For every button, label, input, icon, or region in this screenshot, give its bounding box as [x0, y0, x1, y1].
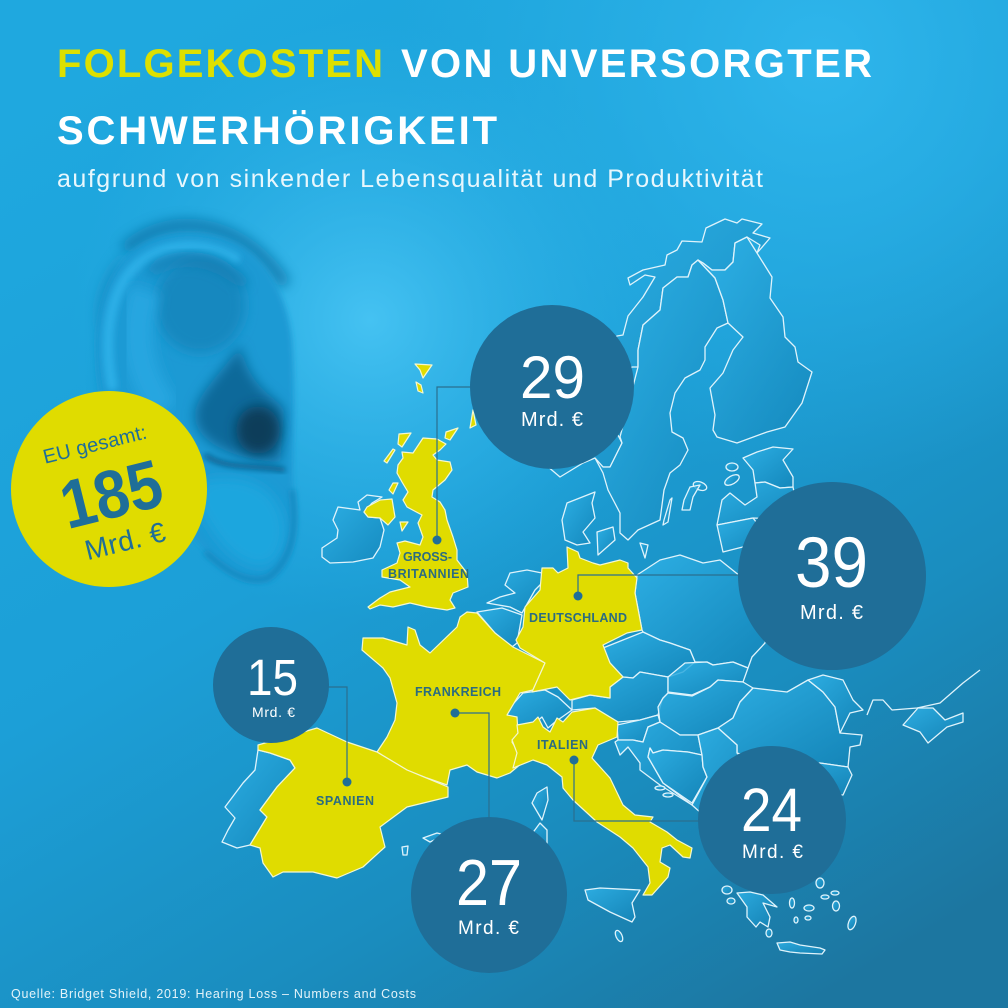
callout: EU gesamt 185: EU gesamt: — [41, 422, 149, 469]
country labels: FRANKREICH — [415, 685, 501, 699]
callout: Deutschland 39: Mrd. € — [800, 602, 863, 624]
callout: Frankreich 27: Mrd. € — [458, 918, 519, 939]
callout: Spanien 15 — [213, 627, 329, 743]
callout: Spanien 15: 15 — [247, 649, 298, 706]
country labels: BRITANNIEN — [388, 567, 469, 581]
callout: EU gesamt 185 — [11, 391, 207, 587]
callout: Deutschland 39 — [738, 482, 926, 670]
country: Italy — [512, 708, 692, 895]
callout: EU gesamt 185: 185 — [53, 445, 170, 544]
country: United Kingdom — [364, 364, 476, 610]
callout: Großbritannien 29: Mrd. € — [521, 409, 583, 431]
country labels: GROSS- — [403, 550, 452, 564]
country labels — [316, 550, 627, 808]
title: highlighted word: FOLGEKOSTEN — [57, 42, 383, 86]
source note: Quelle: Bridget Shield, 2019: Hearing Loss – Numbers and Costs — [11, 987, 416, 1001]
title — [57, 42, 872, 153]
callout: Großbritannien 29: 29 — [520, 344, 585, 411]
country: Germany — [516, 547, 642, 700]
callout: Italien 24 — [698, 746, 846, 894]
country: Spain — [250, 728, 448, 878]
country labels: DEUTSCHLAND — [529, 611, 627, 625]
callout: Spanien 15: Mrd. € — [252, 704, 295, 720]
title: VON UNVERSORGTER — [401, 42, 872, 86]
icon: ear — [97, 226, 295, 582]
country labels: ITALIEN — [537, 738, 588, 752]
callout: Italien 24: 24 — [741, 776, 802, 844]
callout: Großbritannien 29 — [470, 305, 634, 469]
title: SCHWERHÖRIGKEIT — [57, 108, 497, 153]
subtitle: aufgrund von sinkender Lebensqualität und Produktivität — [57, 165, 763, 193]
country labels: SPANIEN — [316, 794, 374, 808]
callout: Deutschland 39: 39 — [795, 524, 868, 603]
callout: Frankreich 27 — [411, 817, 567, 973]
callout: Frankreich 27: 27 — [456, 846, 522, 919]
country: France — [362, 612, 545, 785]
callout: Italien 24: Mrd. € — [742, 842, 803, 863]
callout: EU gesamt 185: Mrd. € — [82, 516, 169, 566]
map: other European countries — [222, 219, 980, 954]
map: highlighted countries — [250, 364, 692, 895]
leader lines — [325, 387, 742, 825]
leader dots — [342, 536, 582, 786]
